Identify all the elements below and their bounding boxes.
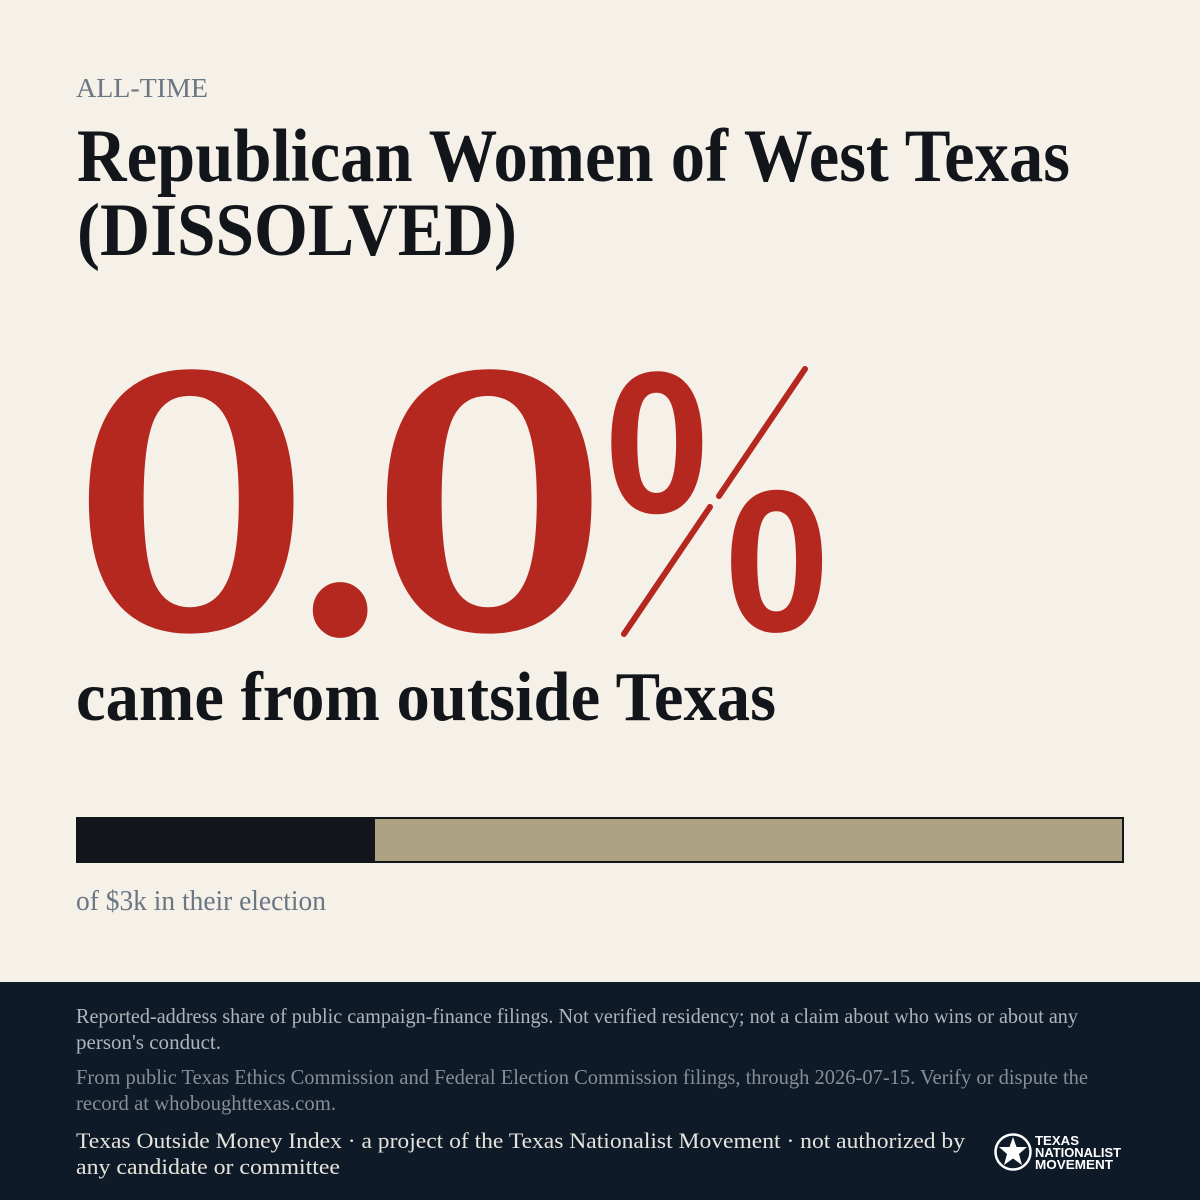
disclaimer text: Reported-address share of public campaign-finance filings. Not verified residency; not a claim about who wins or about any <box>76 1004 1078 1028</box>
attribution text: Texas Outside Money Index · a project of the Texas Nationalist Movement · not authorized by <box>76 1128 965 1153</box>
headline statistic <box>79 292 828 708</box>
icon: star in ring <box>996 1134 1030 1170</box>
logo wordmark: NATIONALIST <box>1035 1145 1121 1160</box>
logo: Texas Nationalist Movement <box>996 1133 1121 1172</box>
title: (DISSOLVED) <box>77 189 517 272</box>
source text: record at whoboughttexas.com. <box>76 1091 336 1115</box>
footer panel <box>0 982 1200 1200</box>
headline statistic: 0 <box>377 292 601 705</box>
logo wordmark <box>1035 1133 1121 1172</box>
title <box>77 115 1070 272</box>
logo wordmark: MOVEMENT <box>1035 1157 1113 1172</box>
attribution text: any candidate or committee <box>76 1154 340 1179</box>
headline statistic: . <box>298 327 382 708</box>
progress bar <box>76 817 1123 863</box>
source text <box>76 1065 1088 1115</box>
bar caption: of $3k in their election <box>76 886 326 917</box>
disclaimer text <box>76 1004 1078 1054</box>
source text: From public Texas Ethics Commission and Federal Election Commission filings, through 2026-07-15. Verify or dispute the <box>76 1065 1088 1089</box>
logo wordmark: TEXAS <box>1035 1133 1079 1148</box>
headline statistic: % <box>605 292 828 706</box>
disclaimer text: person's conduct. <box>76 1030 221 1054</box>
attribution text <box>76 1128 965 1179</box>
headline statistic: 0 <box>79 292 303 705</box>
statistic caption: came from outside Texas <box>76 659 776 736</box>
eyebrow: time period: ALL-TIME <box>76 73 208 103</box>
title: Republican Women of West Texas <box>77 115 1070 198</box>
